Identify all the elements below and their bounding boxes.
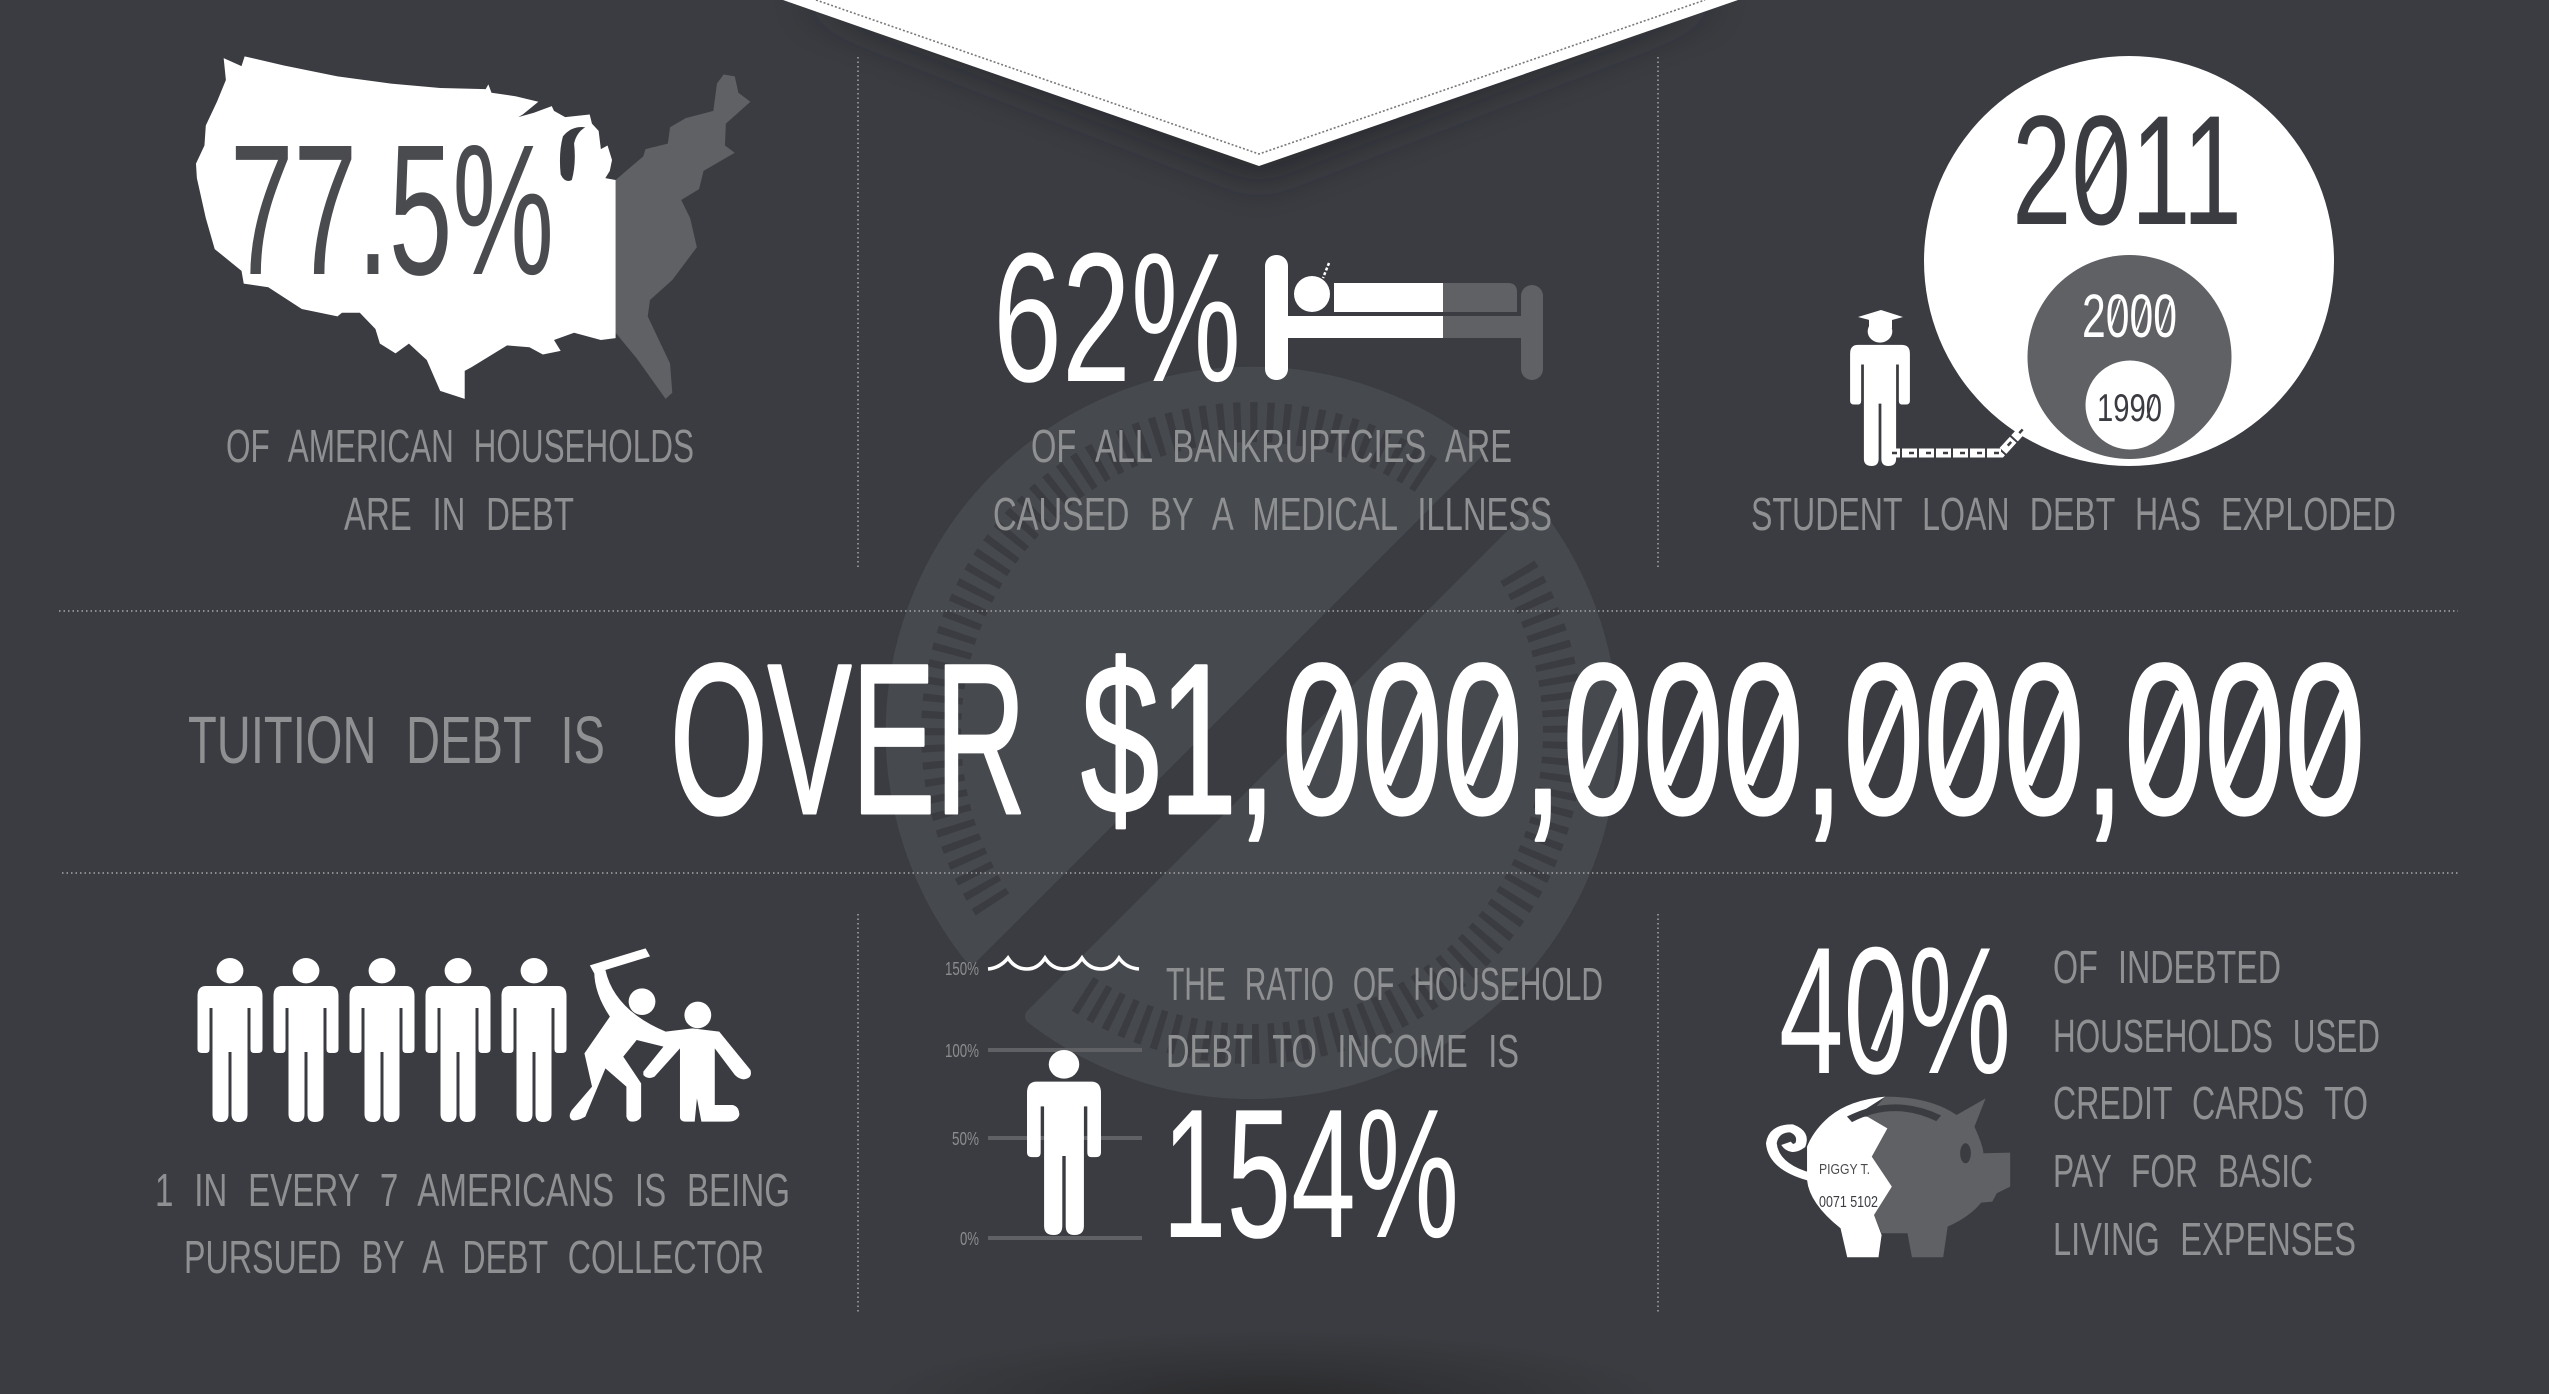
panel: credit cards (1771, 910, 2380, 1265)
headline number (670, 620, 2365, 859)
caption: CAUSED BY A MEDICAL ILLNESS (993, 488, 1552, 540)
caption: PURSUED BY A DEBT COLLECTOR (184, 1231, 764, 1283)
stat: 62%: 62% (993, 214, 1241, 420)
caption: OF AMERICAN HOUSEHOLDS (226, 420, 694, 472)
icon: collector striking person (570, 952, 751, 1122)
caption (155, 1164, 790, 1283)
chart: debt level scale: 50% (952, 1129, 979, 1149)
caption: LIVING EXPENSES (2053, 1213, 2356, 1265)
panel: bankruptcies (993, 214, 1552, 540)
caption: OF ALL BANKRUPTCIES ARE (1031, 420, 1512, 472)
watermark: prohibition sign (894, 375, 1610, 1091)
caption: 1 IN EVERY 7 AMERICANS IS BEING (155, 1164, 790, 1216)
floor shadow (870, 1324, 1670, 1394)
icon: credit card piggy bank: PIGGY T. (1819, 1161, 1870, 1178)
panel: student loan debt (1751, 56, 2396, 540)
caption: CREDIT CARDS TO (2053, 1077, 2368, 1129)
caption (2053, 941, 2380, 1265)
caption: ARE IN DEBT (344, 488, 574, 540)
chart: debt ball circles (1924, 56, 2334, 466)
chart: debt level scale (945, 958, 1142, 1249)
icon: hospital bed (1265, 255, 1543, 380)
caption: HOUSEHOLDS USED (2053, 1010, 2380, 1062)
icon: US map (196, 56, 750, 399)
caption (993, 420, 1552, 540)
chevron banner (783, 0, 1738, 178)
caption: OF INDEBTED (2053, 941, 2281, 993)
chart: debt ball circles: 1990 (2097, 387, 2162, 430)
chart: debt level scale: 150% (945, 959, 979, 979)
chart: debt ball circles: 2000 (2082, 282, 2177, 350)
panel: tuition debt (188, 620, 2365, 859)
panel: debt to income (945, 958, 1603, 1276)
panel: households in debt (196, 56, 750, 540)
icon: credit card piggy bank: 0071 5102 (1819, 1194, 1878, 1211)
stat: 40% (1779, 910, 2011, 1112)
label: tuition debt is: TUITION DEBT IS (188, 703, 605, 778)
caption: DEBT TO INCOME IS (1166, 1025, 1519, 1077)
chart: debt level scale: 100% (945, 1041, 979, 1061)
panel: debt collector (155, 952, 790, 1283)
stat: 40%: 40% (1779, 910, 2011, 1112)
headline number: OVER (670, 620, 1026, 859)
stat: 77.5%: 77.5% (230, 107, 554, 314)
caption: PAY FOR BASIC (2053, 1145, 2313, 1197)
headline number: $1, (1081, 620, 1276, 859)
caption (226, 420, 694, 540)
icon: credit card piggy bank (1771, 1097, 2010, 1257)
caption (1166, 958, 1603, 1077)
icon: row of people (198, 958, 566, 1122)
chart: debt level scale: 0% (960, 1229, 979, 1249)
stat: 154%: 154% (1162, 1070, 1459, 1276)
caption: THE RATIO OF HOUSEHOLD (1166, 958, 1603, 1010)
icon: graduate chained (1850, 310, 2024, 466)
chart: debt ball circles: 2011 (2012, 84, 2242, 258)
